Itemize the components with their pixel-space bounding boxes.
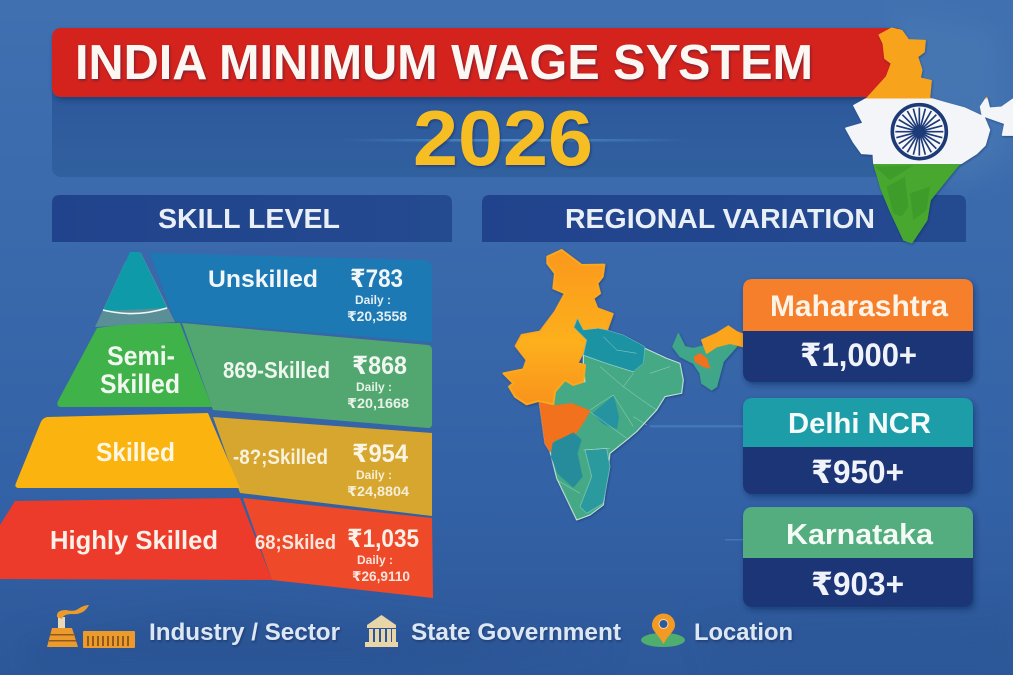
tier: skilled: -8?;Skilled: [233, 446, 328, 469]
title banner: [52, 28, 905, 97]
ashoka chakra: [892, 105, 946, 159]
india flag map: [846, 28, 1013, 243]
tier: semi-skilled: 869-Skilled: [223, 357, 330, 383]
header panel: [52, 40, 887, 177]
section heading: regional variation: REGIONAL VARIATION: [565, 203, 875, 234]
regional map of india: [503, 250, 745, 520]
tier: highly skilled: [0, 498, 433, 598]
northeast orange: [702, 326, 745, 353]
card: karnataka: ₹903+: [811, 566, 904, 602]
legend: state government: [365, 615, 621, 647]
section heading: regional variation: [482, 195, 966, 242]
card: karnataka: Karnataka: [786, 519, 934, 551]
legend: industry / sector: [47, 605, 340, 648]
tier: semi-skilled: ₹868: [352, 352, 407, 380]
tier: skilled: ₹24,8804: [347, 484, 410, 499]
south and central base: [539, 348, 683, 520]
section heading: skill level: [52, 195, 452, 242]
legend: industry / sector: Industry / Sector: [149, 619, 340, 646]
north teal region: [574, 318, 645, 372]
legend: location: [641, 614, 793, 647]
icon: government building: [365, 615, 398, 647]
tier: semi-skilled: [57, 323, 432, 428]
state borders: [557, 337, 670, 493]
section heading: skill level: SKILL LEVEL: [158, 203, 340, 234]
tier: highly skilled: ₹26,9110: [352, 569, 410, 584]
north orange region: [503, 250, 613, 404]
tier: highly skilled: 68;Skiled: [255, 532, 336, 554]
card: maharashtra: [743, 279, 973, 382]
tier: highly skilled: Highly Skilled: [50, 525, 218, 555]
karnataka: [552, 433, 582, 487]
tier: skilled: [15, 413, 432, 516]
northeast green: [673, 333, 737, 390]
legend: state government: State Government: [411, 619, 621, 646]
title text: INDIA MINIMUM WAGE SYSTEM: [75, 36, 813, 90]
card: delhi ncr: ₹950+: [811, 454, 904, 490]
tier: highly skilled: ₹1,035: [347, 525, 419, 553]
tier: unskilled: ₹20,3558: [347, 309, 407, 324]
tier: unskilled: [95, 252, 432, 342]
tier: unskilled: ₹783: [350, 265, 403, 293]
card: delhi ncr: [743, 398, 973, 494]
tier: semi-skilled: ₹20,1668: [347, 396, 410, 411]
northeast small orange: [694, 353, 710, 368]
icon: location pin: [641, 614, 685, 647]
card: karnataka: [743, 507, 973, 607]
pyramid chart: [0, 252, 433, 598]
tier: unskilled: Unskilled: [208, 266, 318, 293]
east central: [593, 397, 618, 428]
icon: factory: [47, 605, 135, 648]
legend: location: Location: [694, 619, 793, 646]
connector lines: [650, 425, 745, 540]
tier: skilled: Daily :: [356, 468, 392, 482]
tier: semi-skilled: Daily :: [356, 380, 392, 394]
tier: skilled: ₹954: [352, 440, 408, 468]
year glow line: [340, 139, 690, 142]
card: delhi ncr: Delhi NCR: [788, 408, 931, 440]
card: maharashtra: ₹1,000+: [800, 337, 917, 373]
maharashtra: [539, 402, 590, 452]
card: maharashtra: Maharashtra: [770, 290, 948, 323]
tier: unskilled: Daily :: [355, 293, 391, 307]
tier: semi-skilled: Skilled: [100, 369, 180, 399]
tier: semi-skilled: Semi-: [107, 341, 175, 371]
tamil nadu and andhra: [580, 448, 610, 513]
year 2026: 2026: [413, 94, 593, 182]
tier: skilled: Skilled: [96, 437, 175, 467]
tier: highly skilled: Daily :: [357, 553, 393, 567]
